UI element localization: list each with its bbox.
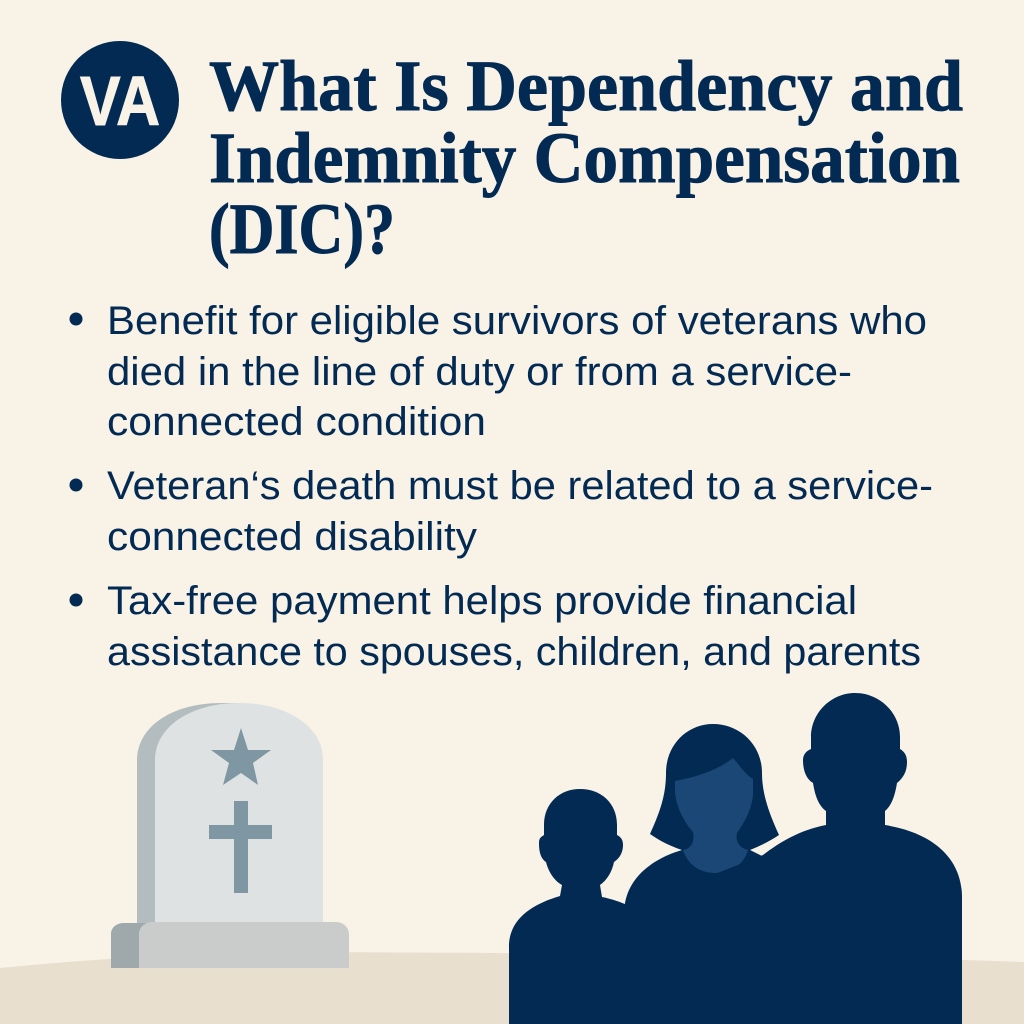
bullet 2: Veteran‘s death must be related to a service- bbox=[107, 464, 933, 508]
icon: VA logo: VA bbox=[80, 62, 160, 140]
bullet 1 bbox=[70, 299, 927, 444]
family silhouettes bbox=[509, 693, 962, 1024]
bullet 1: died in the line of duty or from a service- bbox=[107, 350, 852, 394]
title: (DIC)? bbox=[209, 189, 395, 269]
woman hair bbox=[650, 724, 779, 850]
headstone side bbox=[137, 703, 240, 924]
title bbox=[209, 46, 963, 269]
cross bbox=[209, 801, 272, 893]
icon: VA logo bbox=[61, 41, 179, 159]
bullet 1: connected condition bbox=[107, 400, 486, 444]
headstone face bbox=[155, 703, 323, 924]
bullet 3: assistance to spouses, children, and parents bbox=[107, 630, 921, 674]
title: Indemnity Compensation bbox=[209, 118, 960, 198]
icon: headstone bbox=[111, 703, 349, 968]
bullet 3: Tax-free payment helps provide financial bbox=[107, 579, 857, 623]
bullet list bbox=[70, 299, 933, 674]
woman face bbox=[675, 758, 753, 873]
base front bbox=[139, 922, 349, 968]
bullet 2: connected disability bbox=[107, 515, 477, 559]
ground bbox=[0, 952, 1024, 1024]
star bbox=[211, 728, 271, 785]
bullet 1: Benefit for eligible survivors of veterans who bbox=[107, 299, 927, 343]
woman body bbox=[625, 850, 800, 1024]
base side bbox=[111, 923, 150, 968]
bullet 2 bbox=[70, 464, 933, 559]
man bbox=[700, 693, 962, 1024]
title: What Is Dependency and bbox=[209, 46, 963, 126]
child bbox=[509, 789, 640, 1024]
bullet 3 bbox=[70, 579, 921, 674]
